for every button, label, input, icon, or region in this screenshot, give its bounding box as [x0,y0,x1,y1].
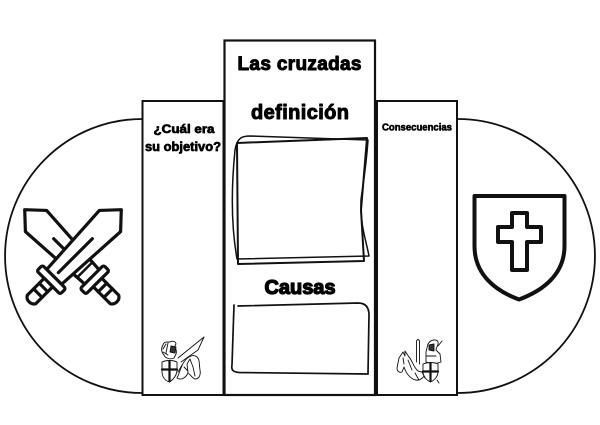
cross [498,213,541,270]
panel: central [224,40,375,395]
heading: objective question: ¿Cuál era [154,122,215,136]
capsule background [5,119,595,393]
icon: crossed swords [13,198,133,314]
heading: objective question: su objetivo? [145,140,221,154]
front sword [17,198,133,314]
back sword [13,198,129,314]
heading: consequences: Consecuencias [382,122,452,134]
icon: knight with lance [162,337,204,382]
icon: shield with cross [474,196,564,300]
panel: consequences [377,101,457,395]
definition box [232,136,369,264]
heading: definition: definición [251,102,349,124]
icon: knight with sword [397,340,442,383]
panel: objective [142,101,224,395]
causes box [232,303,369,374]
heading: causes: Causas [264,277,336,299]
heading: objective question [145,122,221,154]
title: Las cruzadas [238,54,362,75]
